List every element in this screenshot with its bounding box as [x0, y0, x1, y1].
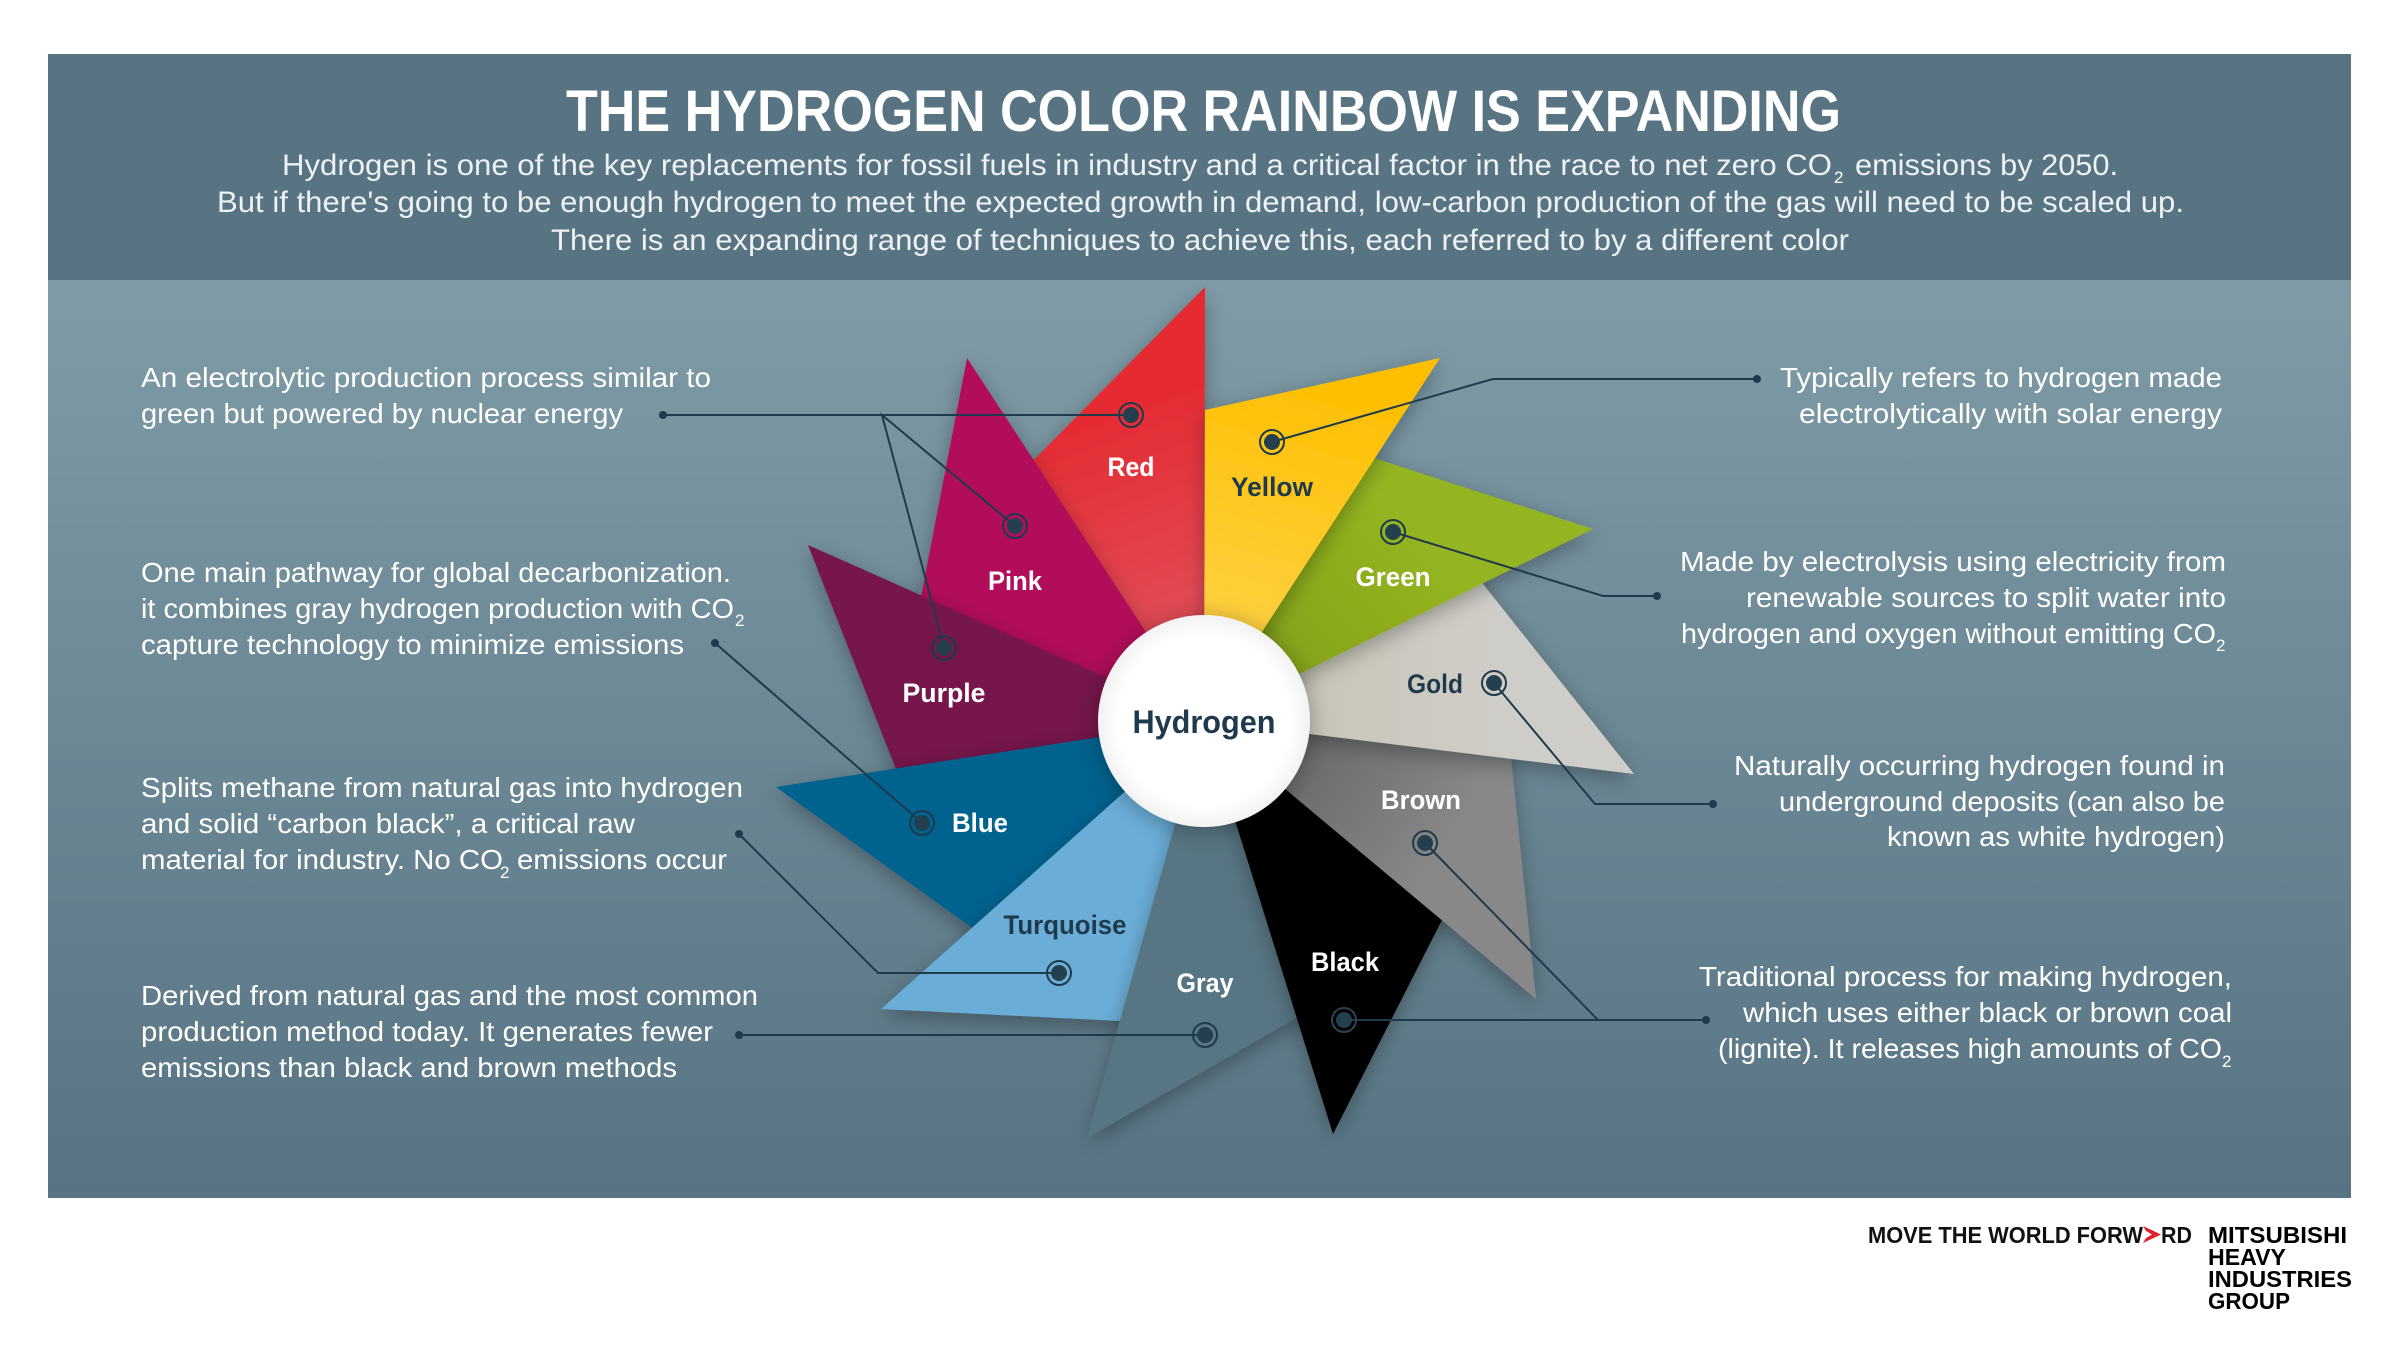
connector: green: [1381, 520, 1661, 600]
text: gold description: underground deposits (can also be: [1779, 786, 2225, 817]
blade: blue: [776, 721, 1204, 955]
logo wordmark: [2208, 1222, 2352, 1314]
text: gray description: production method today. It generates fewer: [141, 1016, 713, 1047]
blade: yellow: [1204, 358, 1440, 721]
text: gray description: Derived from natural gas and the most common: [141, 980, 758, 1011]
connector: black and brown: [1332, 831, 1710, 1032]
header panel: [48, 54, 2351, 280]
pinwheel diagram: [776, 287, 1634, 1138]
text: black and brown description: 2: [2222, 1052, 2231, 1071]
tagline: RD: [2161, 1222, 2192, 1248]
label: pink: Pink: [988, 566, 1043, 596]
blade: black: [1204, 721, 1470, 1134]
text: blue description: One main pathway for global decarbonization.: [141, 557, 731, 588]
text: green description: hydrogen and oxygen without emitting CO: [1681, 618, 2216, 649]
blade: brown: [1204, 700, 1536, 999]
icon: red arrow A: [2143, 1226, 2161, 1243]
text: black and brown description: Traditional process for making hydrogen,: [1699, 961, 2232, 992]
blade: turquoise: [881, 721, 1204, 1024]
text: gold description: [1734, 750, 2225, 852]
blade: green: [1204, 447, 1593, 721]
text: black and brown description: which uses either black or brown coal: [1742, 997, 2232, 1028]
label: gold: Gold: [1407, 669, 1463, 699]
center circle: [1098, 615, 1310, 827]
intro text: emissions by 2050.: [1855, 149, 2118, 182]
label: purple: Purple: [902, 678, 986, 708]
text: black and brown description: [1699, 961, 2232, 1071]
text: turquoise description: 2: [500, 863, 509, 882]
label: yellow: Yellow: [1231, 472, 1314, 502]
connector: blue: [711, 639, 934, 835]
text: turquoise description: emissions occur: [517, 844, 727, 875]
text: turquoise description: Splits methane from natural gas into hydrogen: [141, 772, 743, 803]
text: green description: Made by electrolysis using electricity from: [1680, 546, 2226, 577]
tagline: MOVE THE WORLD FORW: [1868, 1222, 2143, 1248]
intro text: But if there's going to be enough hydrogen to meet the expected growth in demand, low-carbon production of the gas will need to be scaled up.: [217, 186, 2184, 219]
intro text: Hydrogen is one of the key replacements for fossil fuels in industry and a critical factor in the race to net zero CO: [282, 149, 1832, 182]
connector: gray: [735, 1023, 1217, 1047]
text: yellow description: Typically refers to hydrogen made: [1780, 362, 2222, 393]
label: green: Green: [1356, 562, 1430, 592]
connector: gold: [1482, 671, 1717, 808]
main panel: [48, 280, 2351, 1198]
logo wordmark: GROUP: [2208, 1288, 2290, 1314]
connector: turquoise: [735, 830, 1071, 985]
connector: yellow: [1260, 375, 1761, 454]
text: turquoise description: and solid “carbon black”, a critical raw: [141, 808, 636, 839]
intro text: There is an expanding range of techniques to achieve this, each referred to by a different color: [551, 224, 1849, 257]
center label: Hydrogen: [1132, 704, 1276, 740]
text: green description: 2: [2216, 636, 2225, 655]
text: green description: renewable sources to split water into: [1746, 582, 2226, 613]
text: yellow description: electrolytically with solar energy: [1799, 398, 2222, 429]
text: green description: [1680, 546, 2226, 655]
text: black and brown description: (lignite). It releases high amounts of CO: [1718, 1033, 2222, 1064]
blade: gold: [1204, 555, 1634, 774]
blade: pink: [905, 358, 1204, 721]
logo wordmark: HEAVY: [2208, 1244, 2286, 1270]
intro text: [217, 149, 2184, 257]
blade: purple: [808, 545, 1204, 805]
label: black: Black: [1311, 947, 1380, 977]
text: blue description: [141, 557, 744, 660]
text: blue description: capture technology to minimize emissions: [141, 629, 684, 660]
text: turquoise description: material for industry. No CO: [141, 844, 503, 875]
text: pink description: An electrolytic production process similar to: [141, 362, 711, 393]
intro text: 2: [1834, 168, 1843, 187]
title: THE HYDROGEN COLOR RAINBOW IS EXPANDING: [566, 79, 1841, 144]
connector: nuclear text to red, pink and purple: [659, 403, 1143, 660]
text: gray description: [141, 980, 758, 1083]
blade: red: [1000, 287, 1205, 721]
label: blue: Blue: [952, 808, 1008, 838]
text: blue description: 2: [735, 611, 744, 630]
logo wordmark: INDUSTRIES: [2208, 1266, 2352, 1292]
text: yellow description: [1780, 362, 2222, 429]
text: gold description: known as white hydrogen): [1887, 821, 2225, 852]
blade: gray: [1087, 721, 1340, 1138]
text: gray description: emissions than black and brown methods: [141, 1052, 677, 1083]
text: pink description: green but powered by nuclear energy: [141, 398, 623, 429]
label: gray: Gray: [1176, 968, 1234, 998]
text: blue description: it combines gray hydrogen production with CO: [141, 593, 734, 624]
label: turquoise: Turquoise: [1004, 910, 1126, 940]
text: gold description: Naturally occurring hydrogen found in: [1734, 750, 2225, 781]
label: brown: Brown: [1381, 785, 1461, 815]
label: red: Red: [1108, 452, 1154, 482]
text: pink description: [141, 362, 711, 429]
logo wordmark: MITSUBISHI: [2208, 1222, 2347, 1248]
text: turquoise description: [141, 772, 743, 882]
